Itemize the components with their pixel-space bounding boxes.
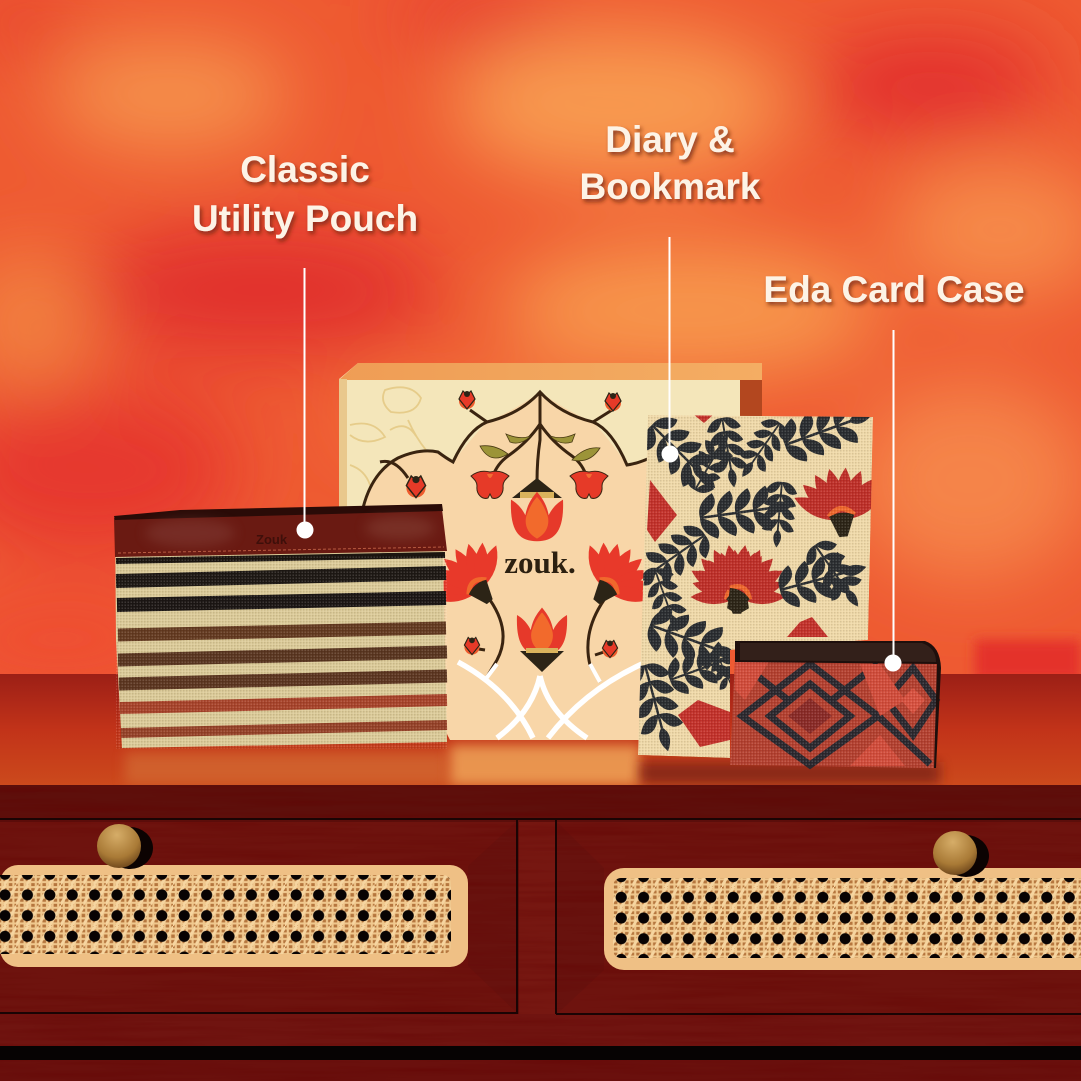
knob left bbox=[97, 824, 153, 869]
table top bbox=[0, 674, 1081, 786]
label: Classic Utility Pouch bbox=[192, 149, 418, 538]
label: Diary & Bookmark bbox=[580, 119, 761, 462]
stems bbox=[472, 600, 610, 682]
card case bbox=[730, 641, 941, 768]
pouch logo: Zouk bbox=[256, 532, 288, 547]
right cane panel bbox=[604, 868, 1081, 970]
white swoosh bbox=[458, 662, 642, 738]
box logo: zouk. bbox=[504, 545, 576, 580]
label: Classic Utility Pouch: Utility Pouch bbox=[192, 198, 418, 239]
center tulip bbox=[511, 478, 563, 541]
label: Eda Card Case bbox=[763, 269, 1025, 672]
arch line bbox=[363, 392, 650, 508]
label: Classic Utility Pouch: Classic bbox=[240, 149, 370, 190]
label: Eda Card Case: Eda Card Case bbox=[763, 269, 1025, 310]
label: Diary & Bookmark: Bookmark bbox=[580, 166, 761, 207]
left cane panel bbox=[0, 865, 468, 967]
lower tulip bbox=[517, 608, 567, 672]
background: orange-red gradient wall bbox=[0, 0, 1081, 700]
label: Diary & Bookmark: Diary & bbox=[605, 119, 735, 160]
cream corners above arch bbox=[347, 380, 740, 508]
striped pouch bbox=[114, 504, 447, 749]
diary bbox=[638, 415, 873, 758]
dresser cabinet wood bbox=[0, 785, 1081, 1081]
gift box bbox=[339, 363, 762, 740]
olive leaves bbox=[480, 434, 600, 461]
knob right bbox=[933, 831, 989, 877]
